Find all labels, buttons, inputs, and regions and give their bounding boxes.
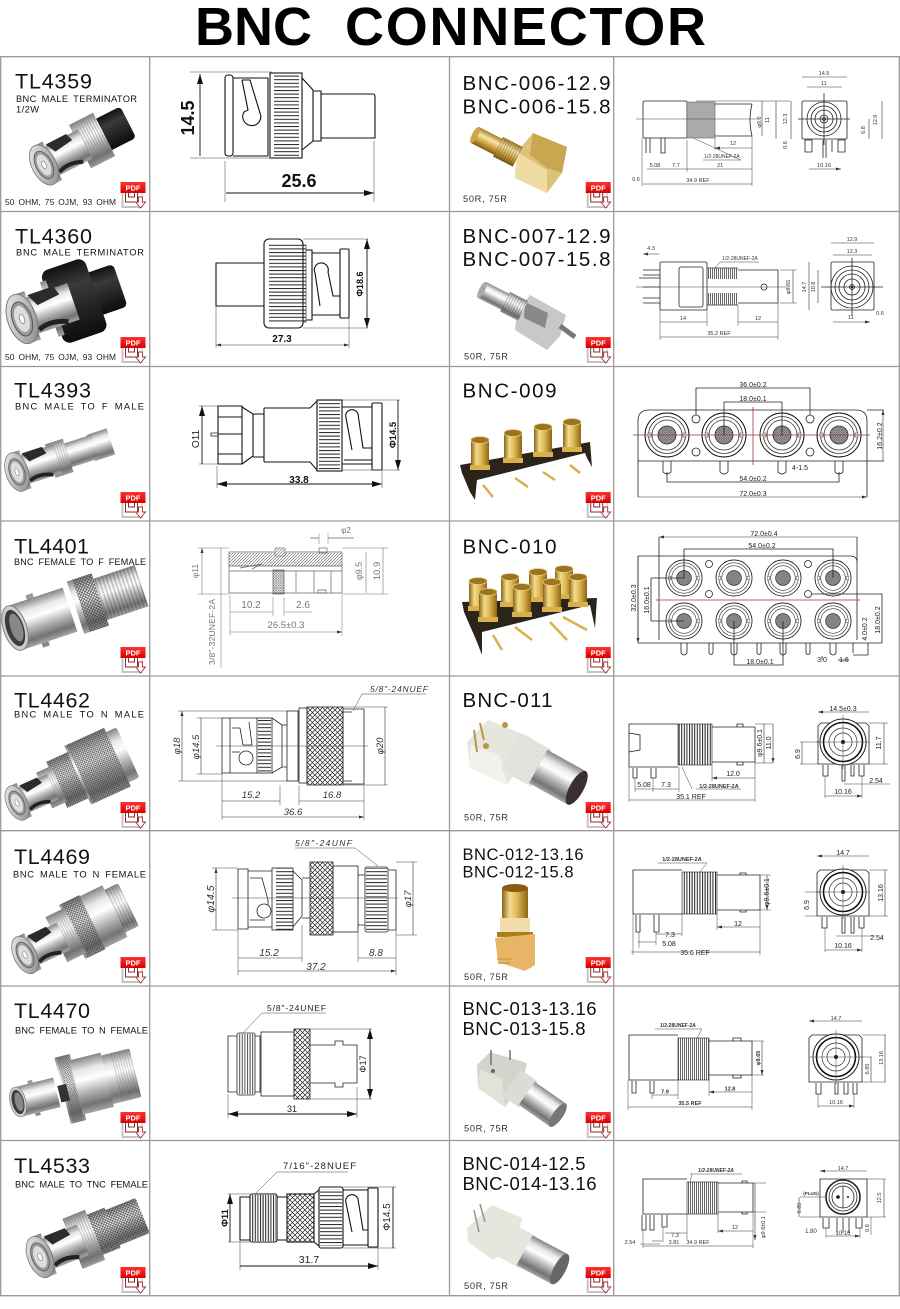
heading: BNC-013: BNC-013-15.8 — [462, 1018, 586, 1039]
drawing: BNC-013 side and front views: φ9.65 — [756, 1051, 762, 1065]
drawing: BNC-014 side and front views: 2.54 — [625, 1240, 635, 1246]
drawing: BNC-011 side and front views: 2.54 — [869, 778, 883, 785]
description: BNC FEMALE TO N FEMALE — [15, 1025, 148, 1035]
photo: vertical gold connector — [495, 884, 535, 971]
drawing: TL4393 dimensions: 33.8 — [289, 475, 309, 486]
drawing: BNC-009 front view — [633, 382, 884, 498]
drawing: BNC-011 side and front views: 35.1 REF — [676, 794, 706, 801]
drawing: BNC-014 side and front views: φ9.6±0.1 — [761, 1216, 767, 1238]
icon: PDF download: PDF — [126, 804, 141, 812]
drawing: BNC-013 side and front views — [628, 1016, 886, 1110]
drawing: BNC-012 side and front views: 35.6 REF — [680, 950, 710, 957]
drawing: BNC-014 side and front views: 1/2-28UNEF-2A — [698, 1168, 734, 1174]
drawing: BNC-007 side and front views: 12.3 — [847, 249, 857, 255]
drawing: TL4469 dimensions — [205, 838, 417, 975]
drawing: TL4401 section view: 2.6 — [296, 600, 310, 611]
drawing: BNC-007 side and front views: 12.9 — [847, 237, 857, 243]
heading: TL4462: TL4462 — [14, 688, 90, 712]
photo: four-port gold connector block — [460, 418, 592, 500]
drawing: TL4462 dimensions: φ14.5 — [191, 734, 202, 759]
heading: BNC-011: BNC-011 — [462, 689, 552, 712]
icon: PDF download — [120, 647, 146, 673]
drawing: BNC-007 side and front views: 35.2 REF — [707, 331, 731, 337]
icon: PDF download — [586, 647, 611, 673]
photo: BNC female to F female adapter — [0, 560, 150, 658]
drawing: BNC-011 side and front views: 11.7 — [876, 736, 883, 750]
drawing: TL4470 dimensions: Φ17 — [358, 1055, 368, 1073]
heading: BNC-014 — [462, 1153, 596, 1194]
drawing: BNC-014 side and front views: 7.3 — [671, 1233, 679, 1239]
drawing: BNC-010 front view: 72.0±0.4 — [750, 531, 778, 538]
drawing: BNC-006 side and front views: 5.08 — [650, 163, 660, 169]
heading: BNC-006: BNC-006-12.9 — [462, 72, 610, 95]
drawing: TL4469 dimensions: φ17 — [403, 890, 414, 907]
panel: BNC-006 product — [462, 72, 611, 208]
heading: BNC-007: BNC-007-12.9 — [462, 225, 610, 248]
icon: PDF download: PDF — [126, 958, 141, 968]
photo: BNC male to N female adapter — [2, 878, 142, 987]
description — [16, 94, 137, 114]
drawing: BNC-009 front view: 36.0±0.2 — [739, 382, 767, 389]
drawing: BNC-014 side and front views: 1.80 — [805, 1229, 817, 1235]
panel: TL4533 product — [14, 1154, 153, 1293]
drawing: BNC-012 side and front views: φ9.6±0.1 — [764, 878, 771, 906]
icon: PDF download: PDF — [126, 338, 141, 348]
drawing: BNC-012 side and front views: 6.9 — [804, 900, 811, 910]
drawing: BNC-011 side and front views: 14.5±0.3 — [829, 706, 857, 713]
drawing: BNC-007 side and front views: 11 — [848, 315, 854, 321]
panel: TL4359 product — [5, 70, 146, 208]
panel: BNC-011 product — [462, 689, 611, 828]
drawing: TL4401 section view: φ11 — [190, 564, 200, 578]
drawing: TL4359 dimensions — [178, 72, 375, 202]
description: BNC FEMALE TO F FEMALE — [14, 557, 146, 567]
icon: PDF download: PDF — [591, 494, 606, 502]
icon: PDF download — [586, 337, 611, 363]
icon: PDF download — [586, 1112, 611, 1138]
photo: silver right-angle connector — [474, 279, 575, 350]
icon: PDF download — [586, 957, 611, 983]
icon: PDF download: PDF — [591, 1114, 606, 1122]
drawing: BNC-006 side and front views: 6.8 — [861, 126, 867, 134]
drawing: TL4469 dimensions: 8.8 — [369, 948, 383, 959]
drawing: TL4462 dimensions: φ18 — [172, 737, 183, 754]
drawing: BNC-010 front view: 18.0±0.1 — [746, 659, 774, 666]
drawing: BNC-012 side and front views: 7.3 — [665, 932, 675, 939]
panel: BNC-010 product — [462, 536, 611, 673]
heading: BNC-014: BNC-014-12.5 — [462, 1153, 586, 1174]
drawing: BNC-011 side and front views: 12.0 — [726, 771, 740, 778]
drawing: BNC-011 side and front views: 11.0 — [766, 736, 773, 750]
photo: white right-angle connector — [477, 1050, 571, 1131]
drawing: BNC-014 side and front views: (PLUG) — [803, 1191, 819, 1196]
drawing: BNC-007 side and front views: 12 — [755, 316, 761, 322]
drawing: BNC-014 side and front views: 3.81 — [669, 1240, 679, 1246]
drawing: BNC-009 front view: 16.2±0.2 — [877, 422, 884, 450]
impedance note: 50 OHM, 75 OJM, 93 OHM — [5, 197, 116, 207]
drawing: TL4470 dimensions: 31 — [287, 1104, 297, 1114]
drawing: TL4401 section view: 3/8"-32UNEF-2A — [207, 599, 217, 665]
drawing: BNC-011 side and front views: 10.16 — [834, 789, 852, 796]
impedance note: 50R, 75R — [463, 194, 507, 204]
panel: TL4469 product — [2, 845, 146, 987]
photo: male terminator — [22, 100, 139, 192]
heading: TL4470: TL4470 — [14, 999, 90, 1023]
drawing: BNC-012 side and front views: 13.16 — [878, 884, 885, 902]
drawing: BNC-006 side and front views: 11 — [821, 81, 827, 87]
heading: BNC-014: BNC-014-13.16 — [462, 1173, 596, 1194]
drawing: BNC-010 front view: 3.0 — [817, 657, 827, 664]
icon: PDF download — [586, 492, 611, 518]
drawing: TL4462 dimensions: φ20 — [375, 737, 386, 754]
panel: TL4401 product — [0, 534, 150, 673]
heading: BNC-013: BNC-013-13.16 — [462, 998, 596, 1019]
drawing: TL4533 dimensions: 31.7 — [299, 1254, 319, 1266]
drawing: BNC-011 side and front views: φ9.6±0.1 — [757, 729, 764, 757]
drawing: TL4469 dimensions: 37.2 — [306, 962, 326, 973]
drawing: BNC-013 side and front views: 1/2-28UNEF-2A — [660, 1023, 696, 1029]
drawing: BNC-013 side and front views: 10.16 — [829, 1100, 843, 1106]
drawing: TL4401 section view: 10.2 — [241, 600, 261, 611]
panel: BNC-009 product — [460, 380, 611, 518]
drawing: BNC-012 side and front views: 1/2-28UNEF-2A — [662, 857, 702, 863]
drawing: BNC-010 front view: 4.0±0.2 — [862, 617, 869, 641]
drawing: TL4462 dimensions: 15.2 — [242, 790, 261, 801]
drawing: TL4393 dimensions — [191, 400, 400, 488]
drawing: BNC-007 side and front views: φ9.65 — [786, 280, 792, 294]
drawing: BNC-014 side and front views: 0.6 — [865, 1224, 871, 1232]
drawing: TL4393 dimensions: O11 — [191, 429, 202, 448]
icon: PDF download: PDF — [126, 494, 141, 502]
drawing: BNC-006 side and front views: 0.6 — [632, 177, 640, 183]
panel: BNC-007 product — [462, 225, 611, 363]
icon: PDF download: PDF — [591, 648, 606, 658]
drawing: TL4401 section view: φ9.5 — [354, 562, 364, 580]
icon: PDF download — [586, 802, 611, 828]
icon: PDF download — [120, 802, 146, 828]
icon: PDF download: PDF — [126, 1268, 141, 1278]
heading: BNC-013 — [462, 998, 596, 1039]
impedance note: 50R, 75R — [464, 972, 508, 982]
drawing: BNC-013 side and front views: 35.5 REF — [678, 1101, 702, 1107]
drawing: TL4401 section view — [190, 526, 388, 668]
drawing: BNC-006 side and front views: 10.16 — [817, 163, 831, 169]
description: BNC MALE TO N MALE — [14, 710, 144, 720]
drawing: BNC-009 front view: 54.0±0.2 — [739, 476, 767, 483]
drawing: TL4470 dimensions — [228, 1003, 372, 1118]
drawing: TL4462 dimensions: 36.6 — [284, 807, 303, 818]
drawing: BNC-006 side and front views: φ9.6 — [757, 116, 763, 128]
heading: BNC-006: BNC-006-15.8 — [462, 96, 610, 118]
heading: TL4360: TL4360 — [15, 224, 92, 248]
drawing: BNC-007 side and front views: 14 — [680, 316, 686, 322]
impedance note: 50R, 75R — [464, 352, 508, 362]
heading: BNC-007: BNC-007-15.8 — [462, 248, 610, 271]
heading: TL4393: TL4393 — [14, 378, 91, 402]
drawing: BNC-013 side and front views: 12.8 — [725, 1086, 735, 1092]
icon: PDF download — [120, 182, 146, 208]
drawing: BNC-012 side and front views: 12 — [734, 921, 742, 928]
drawing: BNC-006 side and front views — [632, 71, 882, 186]
photo: eight-port gold connector block — [462, 566, 597, 655]
photo: gold right-angle connector — [467, 124, 567, 193]
icon: PDF download — [586, 1267, 611, 1293]
description: BNC MALE TERMINATOR — [16, 248, 144, 258]
drawing: BNC-011 side and front views: 7.3 — [661, 782, 671, 789]
icon: PDF download — [120, 957, 146, 983]
drawing: BNC-014 side and front views: 34.9 REF — [686, 1240, 710, 1246]
drawing: BNC-007 side and front views: 1/2-28UNEF-2A — [722, 256, 758, 262]
drawing: BNC-006 side and front views: 34.9 REF — [686, 178, 710, 184]
icon: PDF download: PDF — [591, 184, 606, 192]
drawing: TL4533 dimensions: Φ14.5 — [382, 1203, 393, 1231]
drawing: TL4533 dimensions: Φ11 — [220, 1208, 231, 1227]
heading: BNC-012 — [462, 846, 584, 882]
heading: TL4359: TL4359 — [15, 70, 92, 94]
drawing: BNC-009 front view: 18.0±0.1 — [739, 396, 767, 403]
drawing: TL4360 dimensions: Φ18.6 — [355, 272, 365, 296]
drawing: BNC-006 side and front views: 12 — [730, 141, 736, 147]
drawing: TL4359 dimensions: 14.5 — [178, 100, 198, 136]
drawing: BNC-014 side and front views: 12 — [732, 1225, 738, 1231]
heading: BNC-007 — [462, 225, 610, 271]
drawing: BNC-006 side and front views: 0.6 — [783, 141, 789, 149]
panel: BNC-013 product — [462, 998, 611, 1138]
drawing: BNC-013 side and front views: 7.9 — [661, 1090, 669, 1096]
panel: BNC-012 product — [462, 846, 611, 983]
drawing: BNC-010 front view: 32.0±0.3 — [631, 584, 638, 612]
drawing: TL4401 section view: φ2 — [341, 526, 351, 535]
drawing: BNC-012 side and front views: 10.16 — [834, 943, 852, 950]
drawing: TL4393 dimensions: Φ14.5 — [388, 421, 399, 448]
drawing: TL4533 dimensions: 7/16"-28NUEF — [283, 1161, 356, 1172]
icon: PDF download: PDF — [126, 1114, 141, 1122]
drawing: TL4360 dimensions: 27.3 — [272, 334, 292, 345]
photo: white right-angle connector — [467, 720, 593, 810]
drawing: BNC-007 side and front views: 4.3 — [647, 246, 655, 252]
drawing: BNC-010 front view: 54.0±0.2 — [748, 543, 776, 550]
photo: black-body male terminator — [0, 249, 133, 360]
drawing: BNC-006 side and front views: 21 — [717, 163, 723, 169]
icon: PDF download: PDF — [591, 958, 606, 968]
heading: BNC-009: BNC-009 — [462, 380, 556, 402]
description: BNC MALE TERMINATOR — [16, 94, 137, 104]
drawing: TL4469 dimensions: φ14.5 — [205, 885, 217, 913]
drawing: BNC-011 side and front views: 6.9 — [795, 749, 802, 759]
drawing: BNC-010 front view: 18.0±0.2 — [875, 606, 882, 634]
impedance note: 50R, 75R — [464, 1124, 508, 1134]
heading: BNC-010: BNC-010 — [462, 536, 556, 558]
drawing: BNC-010 front view: 1.5 — [839, 657, 849, 664]
photo: BNC male to N male adapter — [0, 723, 141, 837]
drawing: BNC-010 front view — [631, 531, 882, 666]
description: 1/2W — [16, 104, 39, 114]
drawing: BNC-013 side and front views: 14.7 — [831, 1016, 841, 1022]
icon: PDF download: PDF — [126, 184, 141, 192]
drawing: BNC-009 front view: 4-1.5 — [792, 465, 808, 472]
photo: BNC male to TNC female adapter — [19, 1190, 153, 1287]
description: BNC MALE TO N FEMALE — [13, 869, 146, 879]
drawing: BNC-012 side and front views — [631, 850, 888, 957]
drawing: BNC-011 side and front views — [629, 706, 890, 802]
drawing: TL4401 section view: 10.9 — [372, 562, 383, 580]
icon: PDF download: PDF — [126, 648, 141, 658]
icon: PDF download: PDF — [591, 804, 606, 812]
heading: TL4533: TL4533 — [14, 1154, 90, 1178]
drawing: BNC-006 side and front views: 12.3 — [783, 114, 789, 124]
icon: PDF download: PDF — [591, 1268, 606, 1278]
icon: PDF download — [120, 1112, 146, 1138]
drawing: BNC-007 side and front views — [636, 237, 884, 340]
drawing: TL4469 dimensions: 5/8"-24UNF — [295, 838, 353, 848]
drawing: TL4401 section view: 26.5±0.3 — [268, 620, 304, 631]
icon: PDF download — [586, 182, 611, 208]
icon: PDF download: PDF — [591, 338, 606, 348]
drawing: BNC-014 side and front views — [625, 1166, 886, 1248]
photo: BNC male to F male adapter — [0, 422, 117, 494]
heading: TL4469: TL4469 — [14, 845, 90, 869]
drawing: BNC-014 side and front views: 12.5 — [877, 1193, 883, 1203]
drawing: BNC-007 side and front views: 14.7 — [802, 282, 808, 292]
panel: TL4470 product — [2, 999, 148, 1138]
description: BNC MALE TO F MALE — [15, 402, 144, 412]
drawing: BNC-006 side and front views: 7.7 — [672, 163, 680, 169]
drawing: TL4359 dimensions: 25.6 — [281, 171, 317, 191]
panel: TL4462 product — [0, 688, 146, 837]
impedance note: 50 OHM, 75 OJM, 93 OHM — [5, 352, 116, 362]
drawing: BNC-007 side and front views: 10.8 — [811, 282, 817, 292]
drawing: TL4360 dimensions — [216, 239, 368, 348]
drawing: BNC-014 side and front views: 14.7 — [838, 1166, 848, 1172]
drawing: BNC-012 side and front views: 2.54 — [870, 935, 884, 942]
drawing: BNC-007 side and front views: 0.6 — [876, 311, 884, 317]
panel: BNC-014 product — [462, 1153, 611, 1293]
drawing: BNC-009 front view: 72.0±0.3 — [739, 491, 767, 498]
impedance note: 50R, 75R — [464, 1281, 508, 1291]
heading: BNC-006 — [462, 72, 610, 118]
drawing: TL4470 dimensions: 5/8"-24UNEF — [267, 1003, 326, 1013]
heading: BNC-012: BNC-012-13.16 — [462, 846, 584, 864]
drawing: TL4462 dimensions: 16.8 — [323, 790, 342, 801]
drawing: TL4533 dimensions — [220, 1161, 396, 1270]
panel: TL4360 product — [0, 224, 145, 363]
drawing: BNC-014 side and front views: 10.16 — [835, 1231, 851, 1237]
panel: TL4393 product — [0, 378, 146, 518]
drawing: TL4469 dimensions: 15.2 — [259, 948, 279, 959]
photo: white right-angle connector — [467, 1204, 573, 1288]
drawing: BNC-006 side and front views: 11 — [765, 117, 771, 123]
icon: PDF download — [120, 337, 146, 363]
drawing: BNC-006 side and front views: 14.5 — [819, 71, 829, 77]
drawing: BNC-012 side and front views: 14.7 — [836, 850, 850, 857]
drawing: BNC-013 side and front views: 13.16 — [879, 1051, 885, 1065]
drawing: BNC-006 side and front views: 1/2-28UNEF-2A — [704, 154, 740, 160]
drawing: TL4462 dimensions — [172, 684, 429, 820]
drawing: BNC-014 side and front views: 6.85 — [797, 1203, 803, 1213]
drawing: TL4462 dimensions: 5/8"-24NUEF — [370, 684, 429, 694]
photo: BNC female to N female adapter — [2, 1040, 144, 1137]
heading: BNC-012: BNC-012-15.8 — [462, 864, 574, 882]
description: BNC MALE TO TNC FEMALE — [15, 1180, 148, 1190]
heading: TL4401: TL4401 — [14, 534, 89, 558]
icon: PDF download — [120, 492, 146, 518]
drawing: BNC-011 side and front views: 5.08 — [637, 782, 651, 789]
drawing: BNC-006 side and front views: 12.9 — [873, 115, 879, 125]
impedance note: 50R, 75R — [464, 813, 508, 823]
drawing: BNC-011 side and front views: 1/2-28UNEF-2A — [699, 784, 739, 790]
drawing: BNC-012 side and front views: 5.08 — [662, 941, 676, 948]
drawing: BNC-013 side and front views: 6.85 — [865, 1064, 871, 1074]
drawing: BNC-010 front view: 16.0±0.1 — [644, 586, 651, 614]
